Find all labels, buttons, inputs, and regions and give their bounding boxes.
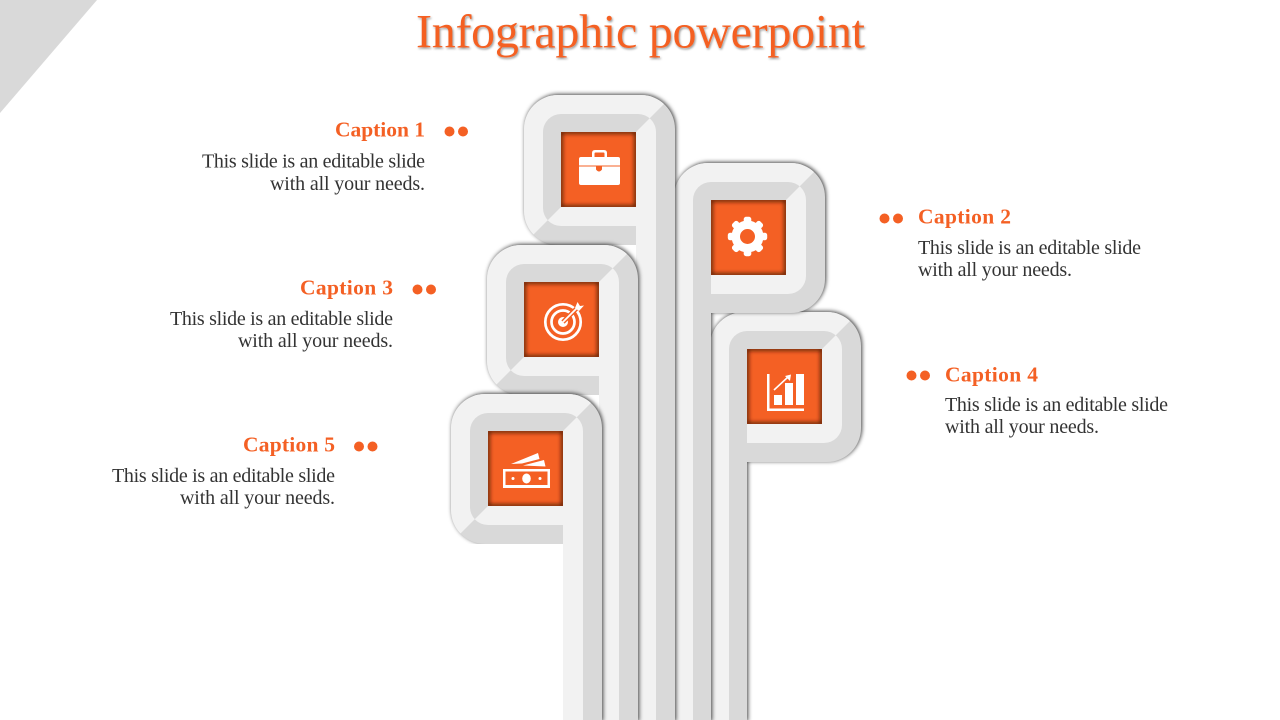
caption 4: Caption 4 bbox=[945, 362, 1038, 386]
caption 3: This slide is an editable slide bbox=[170, 308, 393, 330]
caption 2: This slide is an editable slide bbox=[918, 237, 1141, 259]
caption 3 bbox=[170, 276, 436, 352]
stem panel 4: chart bbox=[710, 312, 861, 720]
caption 5: with all your needs. bbox=[180, 487, 335, 509]
caption 3: Caption 3 bbox=[300, 276, 393, 300]
caption 3: with all your needs. bbox=[238, 330, 393, 352]
caption 4: with all your needs. bbox=[945, 416, 1099, 438]
caption 1: with all your needs. bbox=[270, 173, 425, 195]
caption 2: Caption 2 bbox=[918, 204, 1011, 228]
corner triangle bbox=[0, 0, 97, 113]
caption 5: Caption 5 bbox=[243, 432, 335, 456]
stem panel 1: briefcase bbox=[524, 95, 675, 720]
stem panel 2: gear bbox=[674, 163, 825, 720]
icon: money bbox=[503, 453, 550, 488]
caption 1: This slide is an editable slide bbox=[202, 150, 425, 172]
caption 2 bbox=[880, 204, 1141, 281]
stem panel 5: money bbox=[451, 394, 602, 720]
caption 2: with all your needs. bbox=[918, 259, 1072, 281]
caption 1 bbox=[202, 118, 468, 195]
icon: briefcase bbox=[579, 150, 620, 185]
caption 4: This slide is an editable slide bbox=[945, 394, 1168, 416]
caption 4 bbox=[906, 362, 1168, 438]
icon: gear bbox=[728, 217, 767, 256]
title: Infographic powerpoint bbox=[416, 6, 866, 58]
caption 1: Caption 1 bbox=[335, 118, 425, 142]
icon: target bbox=[545, 302, 584, 340]
icon: bar chart bbox=[767, 374, 804, 411]
caption 5 bbox=[112, 432, 378, 509]
stem panel 3: target bbox=[487, 245, 638, 720]
caption 5: This slide is an editable slide bbox=[112, 465, 335, 487]
